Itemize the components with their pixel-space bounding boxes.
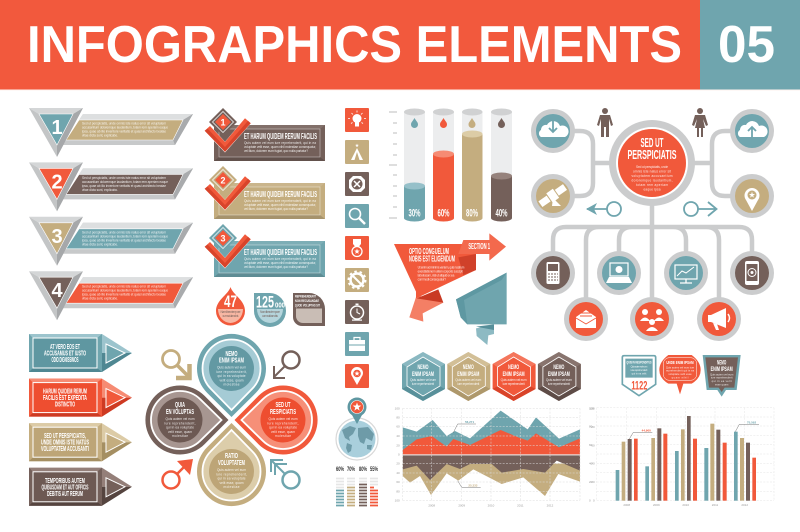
red area series [403, 430, 580, 454]
check box panel 1: ET HARUM QUIDEM RERUM FACILIS [244, 131, 317, 141]
arrow: right teal [684, 202, 716, 216]
right axis labels: 60 [589, 443, 593, 447]
stat badge: 47: 47 [224, 292, 237, 311]
callout teal [453, 420, 476, 433]
petal: brown left: qui in ea voluptate [166, 426, 194, 430]
y axis labels: 100 [395, 406, 400, 410]
petal: tan bottom: Quis autem vel eum [217, 468, 246, 472]
hexagon badge red: Quis autem vel eum [501, 378, 527, 382]
callout red: 44,900 [642, 428, 651, 432]
hexagon badge brown: ENIM IPSAM [548, 371, 570, 378]
arrow tag 3: SED UT PERSPICIATIS, [44, 431, 86, 440]
y axis labels: 40 [396, 434, 400, 438]
icon: upload cloud [730, 109, 774, 153]
hexagon badge tan [447, 352, 490, 401]
right axis labels: 40 [589, 461, 593, 465]
tube 60%: 60% [438, 208, 450, 220]
badge: brown trapezoid tag [703, 355, 741, 397]
check box panel 3: Quis autem vel eum iure reprehenderit, qui in ea [244, 257, 316, 261]
badge: teal shield [622, 356, 656, 396]
hexagon badge teal [402, 352, 445, 401]
stat badge: 125 000 [254, 292, 286, 327]
icon: megaphone [697, 297, 741, 341]
icon: download cloud [531, 109, 575, 153]
central node: doloremque laudantium, [632, 178, 673, 182]
check box panel 1: Quis autem vel eum iure reprehenderit, qui in ea [244, 141, 316, 145]
x axis labels: 2012 [547, 503, 554, 507]
arrow tag 3 [29, 423, 132, 461]
stat badge: text tag: QUOD VOLUPTAS SIT [295, 302, 320, 308]
y axis labels: 20 [396, 462, 400, 466]
2010 bars [675, 416, 697, 501]
tube 40%: 40% [496, 208, 508, 220]
badge: brown trapezoid tag: qui in ea velit [712, 379, 732, 383]
origami red speech banner [394, 233, 506, 322]
origami red speech banner: Ut enim ad minima veniam, quis nostrum [418, 265, 465, 269]
badge: brown trapezoid tag: NEMO [717, 360, 727, 366]
check box panel 1: vel illum, dolorem eum fugiat, quo nulla pariatur? [244, 149, 308, 153]
icon: gear and wrench [345, 268, 369, 292]
check box panel 2: 2 [220, 176, 226, 186]
petal: red right: Quis autem vel eum [268, 417, 298, 421]
hexagon badge red: iure reprehenderit [503, 382, 525, 386]
right axis labels: 80 [589, 425, 593, 429]
hexagon badge tan: ENIM IPSAM [457, 371, 479, 378]
numbered triangle banner 2 [29, 162, 193, 211]
badge: red speech bubble: Quis autem vel eum iure [666, 365, 695, 369]
y axis labels [395, 406, 400, 503]
origami red speech banner: commodi consequatur? [418, 277, 446, 281]
numbered triangle banner 1: Sed ut perspiciatis, unde omnis iste natus error sit voluptatem [82, 122, 166, 126]
origami red speech banner: OPTIO CONGUELUM [409, 247, 449, 256]
icon: red gender arrow [162, 459, 193, 488]
icon: medal [345, 236, 369, 260]
arrow tag 1 [29, 334, 132, 372]
central node: eaque ipsa [644, 188, 661, 192]
stat badge: 125 000: 000 [275, 302, 285, 310]
callout teal: 75,592 [747, 420, 756, 424]
numbered triangle banner 1: ipsa, quae ab illo inventore veritatis et quasi architecto beatae [82, 130, 166, 134]
badge: teal shield: 1122 [631, 378, 648, 392]
petal: tan bottom: iure reprehenderit, [216, 472, 247, 476]
origami teal speech banner [456, 273, 507, 345]
y axis labels: 20 [591, 480, 595, 484]
petal: brown left: velit esse, quam [168, 430, 192, 434]
arrow tag 3: VOLUPTATEM ACCUSANTI [41, 444, 89, 453]
mini segmented bars [336, 467, 378, 506]
origami red speech banner: SECTION 1 [468, 242, 490, 251]
y axis labels: 60 [591, 443, 595, 447]
central node: Sed ut perspiciatis, unde [636, 165, 668, 169]
tan area series [403, 463, 580, 496]
stat badge: 125 000: 125 [256, 292, 274, 312]
badge: teal shield: qui in ea velit [632, 371, 647, 375]
hexagon badge tan: Quis autem vel eum [455, 378, 482, 382]
stat badge: 125 000: cum soluta nobis [262, 314, 278, 318]
petal: tan bottom: RATIO [225, 451, 238, 460]
badge: red speech bubble: reprehenderit qui in ea [666, 369, 695, 373]
arrow tag 1: AT VERO EOS ET [50, 342, 80, 351]
header banner [0, 0, 800, 90]
check box panel 1 [204, 108, 325, 161]
y axis labels: 80 [396, 416, 400, 420]
badge: brown trapezoid tag: iure reprehenderit [711, 376, 733, 380]
petal: teal top: qui in ea voluptate [218, 374, 246, 378]
hexagon badge brown: Quis autem vel eum [546, 378, 572, 382]
numbered triangle banner 3: accusantium doloremque laudantium, totam rem aperiam eaque [82, 234, 168, 238]
central node: omnis iste natus error sit [633, 170, 671, 174]
hexagon badge red [493, 352, 536, 401]
callout teal: 56,271 [465, 420, 474, 424]
numbered triangle banner 3: 3 [51, 226, 63, 248]
numbered triangle banner 1: 1 [51, 117, 63, 139]
y axis labels: 60 [396, 480, 400, 484]
x axis labels: 2009 [458, 503, 465, 507]
petal: red right: SED UT [276, 400, 291, 409]
arrow tag 1: ODIO DIGNISSIMOS [52, 355, 78, 364]
mini segmented bars: 55% [370, 467, 378, 473]
badge: teal shield: QUIS IN RESPONDITUS [626, 359, 652, 364]
badge: teal shield: iure reprehenderit [631, 368, 648, 372]
y axis labels [590, 406, 595, 503]
petal: teal top: molestiae [224, 382, 240, 386]
numbered triangle banner 3: ipsa, quae ab illo inventore veritatis et quasi architecto beatae [82, 238, 166, 242]
numbered triangle banner 3: vitae dicta sunt, explicabo. [82, 242, 118, 246]
icon: teal gender arrow [271, 460, 300, 488]
y axis labels: 40 [591, 462, 595, 466]
petal: brown left [145, 386, 228, 454]
tube 80%: 80% [466, 208, 478, 220]
x axis labels [428, 503, 554, 507]
hexagon badge teal: NEMO [418, 364, 428, 371]
arrow tag 2: FACILIS EST EXPEDITA [43, 393, 87, 402]
petal: teal top: NEMO [226, 349, 238, 358]
petal: tan bottom: qui in ea voluptate [218, 476, 246, 480]
hexagon badge teal: ENIM IPSAM [412, 371, 434, 378]
bar chart [590, 406, 774, 507]
icon: envelope [564, 297, 608, 341]
check box panel 2: vel illum, dolorem eum fugiat, quo nulla pariatur? [244, 207, 308, 211]
numbered triangle banner 4 [29, 271, 193, 320]
arrow tag 4: TEMPORIBUS AUTEM [45, 476, 85, 485]
petal: red right: molestiae [275, 434, 291, 438]
numbered triangle banner 2: Sed ut perspiciatis, unde omnis iste natus error sit voluptatem [82, 176, 166, 180]
petal: tan bottom [197, 423, 266, 506]
mini segmented bars: 80% [359, 467, 367, 473]
y axis labels: 0 [398, 452, 400, 456]
2009 bars [645, 428, 667, 501]
icon: man [597, 108, 613, 137]
icon: clock [345, 300, 369, 324]
numbered triangle banner 3: Sed ut perspiciatis, unde omnis iste natus error sit voluptatem [82, 230, 166, 234]
icon: location pin [345, 364, 369, 388]
badge: teal shield: Quis autem vel eum [631, 365, 648, 369]
icon column [345, 108, 369, 388]
check box panel 1: 1 [220, 118, 226, 128]
badge: red speech bubble: quam nihil [672, 375, 689, 379]
x axis labels: 2008 [428, 503, 435, 507]
numbered triangle banner 1 [29, 108, 193, 157]
origami red speech banner: laboriosam, nisi ut aliquid ex ea [418, 273, 455, 277]
callout red [629, 428, 652, 439]
check box panel 1: voluptate velit esse, quam nihil molestiae consequatur, [244, 145, 316, 149]
stat badge: text tag: NON RECUSANDAE [295, 298, 319, 303]
badge: brown trapezoid tag: esse quam [715, 383, 729, 386]
area chart [395, 406, 594, 507]
petal: brown left: QUIA [175, 400, 185, 409]
origami red speech banner: NOBIS EST ELIGENDUM [409, 254, 455, 263]
numbered triangle banner 1: accusantium doloremque laudantium, totam rem aperiam eaque [82, 126, 168, 130]
petal diagram [145, 334, 318, 506]
petal: tan bottom: velit esse, quam [220, 481, 244, 485]
arrow tag 4: QUIBUSDAM ET AUT OFFICIS [42, 482, 88, 491]
icon: briefcase [345, 332, 369, 356]
arrow tag 4: DEBITIS AUT RERUM [47, 489, 83, 498]
hexagon badge tan: iure reprehenderit [457, 382, 479, 386]
connectors [553, 131, 752, 300]
arrow tag 1: ACCUSAMUS ET IUSTO [44, 348, 86, 358]
numbered triangle banner 4: Sed ut perspiciatis, unde omnis iste natus error sit voluptatem [82, 285, 166, 289]
hexagon badge brown [538, 352, 581, 401]
icon: tan gender arrow [162, 350, 190, 378]
callout tan: 25,333 [468, 484, 478, 488]
icon: woman [692, 108, 708, 137]
x axis labels: 2010 [488, 503, 495, 507]
petal: red right: iure reprehenderit, [268, 421, 299, 425]
tube 30%: 30% [408, 208, 421, 220]
mini segmented bars: 70% [347, 467, 355, 473]
icon: satellite [531, 174, 575, 218]
title: INFOGRAPHICS ELEMENTS [27, 16, 682, 74]
petal: teal top: velit esse, quam [220, 378, 244, 382]
central node: PERSPICIATIS [628, 148, 676, 162]
numbered triangle banner 2: vitae dicta sunt, explicabo. [82, 188, 118, 192]
2011 bars [704, 424, 727, 501]
origami red speech banner: exercitationem ullam corporis suscipit [418, 269, 463, 273]
hexagon badge brown: NEMO [553, 364, 564, 371]
petal: red right: RESPICIATIS [270, 407, 296, 416]
icon: tent [345, 140, 369, 164]
y axis labels: 80 [396, 489, 400, 493]
check box panel 2: ET HARUM QUIDEM RERUM FACILIS [244, 189, 317, 199]
y axis labels: 40 [396, 471, 400, 475]
petal: teal top [197, 334, 266, 417]
check box panel 3 [204, 224, 325, 277]
x axis labels [623, 503, 748, 507]
icon: people group [630, 297, 674, 341]
numbered triangle banner 4: 4 [51, 280, 63, 302]
icon: laptop [597, 251, 641, 295]
central node: SED UT [640, 136, 664, 150]
x axis labels: 2008 [623, 503, 630, 507]
y axis labels: 20 [396, 443, 400, 447]
stat badge: 47 [216, 287, 245, 325]
x axis labels: 2009 [653, 503, 660, 507]
petal: teal top: ENIM IPSAM [219, 356, 244, 364]
petal: brown left: iure reprehenderit, [164, 421, 196, 425]
petal: tan bottom: VOLUPTATEM [218, 458, 245, 467]
chart grid [403, 408, 580, 501]
icon: brown gender arrow [274, 352, 300, 378]
check box panel 3: ET HARUM QUIDEM RERUM FACILIS [244, 247, 317, 257]
petal: teal top: Quis autem vel eum [217, 366, 246, 370]
icon: monitor chart [664, 251, 708, 295]
x axis labels: 2011 [712, 503, 719, 507]
grid [597, 408, 774, 501]
callout tan [458, 481, 481, 488]
petal: teal top: iure reprehenderit, [216, 370, 247, 374]
hexagon badge red: NEMO [508, 364, 519, 371]
stat badge: 47: Nam libero tempore [220, 310, 241, 314]
hexagon badge brown: iure reprehenderit [548, 382, 570, 386]
badge: red speech bubble [659, 355, 701, 394]
x axis labels: 2010 [682, 503, 689, 507]
axis ticks [389, 112, 397, 218]
hexagon badge tan: NEMO [463, 364, 474, 371]
right axis labels: 0 [589, 499, 591, 503]
globe with pin [336, 398, 378, 460]
2012 bars [734, 432, 756, 501]
y axis labels: 100 [395, 499, 400, 503]
x axis labels: 2011 [517, 503, 524, 507]
x axis labels: 2012 [741, 503, 748, 507]
hexagon badge teal: iure reprehenderit [412, 382, 434, 386]
stat badge: 125 000: Nam libero tempore [260, 310, 280, 314]
arrow tag 2: HARUM QUIDEM RERUM [43, 387, 87, 396]
check box panel 3: voluptate velit esse, quam nihil molestiae consequatur, [244, 261, 316, 265]
arrow tag 3: UNDE OMNIS ISTE NATUS [41, 438, 89, 447]
icon: light bulb [345, 108, 369, 132]
arrow tag 4 [29, 468, 132, 506]
numbered triangle banner 2: 2 [51, 171, 63, 193]
teal area series [403, 411, 580, 454]
hexagon badge teal: Quis autem vel eum [410, 378, 436, 382]
petal: tan bottom: molestiae [224, 485, 240, 489]
mini segmented bars: 60% [336, 467, 344, 473]
2008 bars [616, 439, 638, 501]
numbered triangle banner 1: vitae dicta sunt, explicabo. [82, 134, 118, 138]
badge: brown trapezoid tag: ENIM IPSAM [711, 367, 733, 373]
icon: keypad phone [531, 251, 575, 295]
right axis labels [589, 406, 594, 503]
issue number: 05 [718, 16, 775, 74]
test tube chart [389, 108, 512, 222]
numbered triangle banner 4: ipsa, quae ab illo inventore veritatis et quasi architecto beatae [82, 293, 166, 297]
check box panel 3: vel illum, dolorem eum fugiat, quo nulla pariatur? [244, 265, 308, 269]
numbered triangle banner 4: accusantium doloremque laudantium, totam rem aperiam eaque [82, 289, 168, 293]
right axis labels: 20 [589, 480, 593, 484]
central node: voluptatem accusantium [632, 174, 673, 178]
petal: red right: velit esse, quam [271, 430, 295, 434]
icon: magnifier [345, 204, 369, 228]
y axis labels: 0 [593, 499, 595, 503]
badge: red speech bubble: UNDE ENIM IPSAM [666, 360, 694, 365]
icon: star pin [730, 174, 774, 218]
hexagon badge red: ENIM IPSAM [503, 371, 525, 378]
arrow: left teal [586, 202, 621, 216]
y axis labels: 60 [396, 425, 400, 429]
stat badge: text tag [293, 293, 325, 326]
petal: brown left: Quis autem vel eum [166, 417, 195, 421]
right axis labels: 100 [589, 406, 594, 410]
icon: smartphone [730, 251, 774, 295]
check box panel 2: voluptate velit esse, quam nihil molestiae consequatur, [244, 203, 316, 207]
central node [609, 120, 695, 206]
numbered triangle banner 2: ipsa, quae ab illo inventore veritatis et quasi architecto beatae [82, 184, 166, 188]
network diagram [531, 108, 774, 341]
petal: brown left: molestiae [172, 434, 188, 438]
numbered triangle banner 2: accusantium doloremque laudantium, totam rem aperiam eaque [82, 180, 168, 184]
badge: brown trapezoid tag: Quis autem vel eum [710, 372, 734, 376]
badge: red speech bubble: voluptate velit esse [668, 372, 692, 376]
check box panel 2: Quis autem vel eum iure reprehenderit, qui in ea [244, 199, 316, 203]
numbered triangle banner 4: vitae dicta sunt, explicabo. [82, 297, 118, 301]
brown area series [403, 455, 580, 480]
petal: brown left: EN VOLUPTAS [166, 407, 194, 416]
petal: red right: qui in ea voluptate [269, 426, 297, 430]
y axis labels: 80 [591, 425, 595, 429]
stat badge: 47: cum soluta nobis [222, 314, 239, 318]
icon: emblem [345, 172, 369, 196]
stat badge: text tag: REPREHENDERIT [295, 294, 316, 298]
arrow tag 2: DISTINCTIO [55, 400, 75, 409]
arrow tag 2 [29, 379, 132, 417]
check box panel 2 [204, 166, 325, 219]
numbered triangle banner 3 [29, 217, 193, 266]
petal: red right [234, 386, 318, 454]
y axis labels: 100 [590, 406, 595, 410]
check box panel 3: 3 [220, 234, 226, 244]
callout teal [735, 420, 759, 432]
central node: totam rem aperiam [636, 183, 668, 187]
